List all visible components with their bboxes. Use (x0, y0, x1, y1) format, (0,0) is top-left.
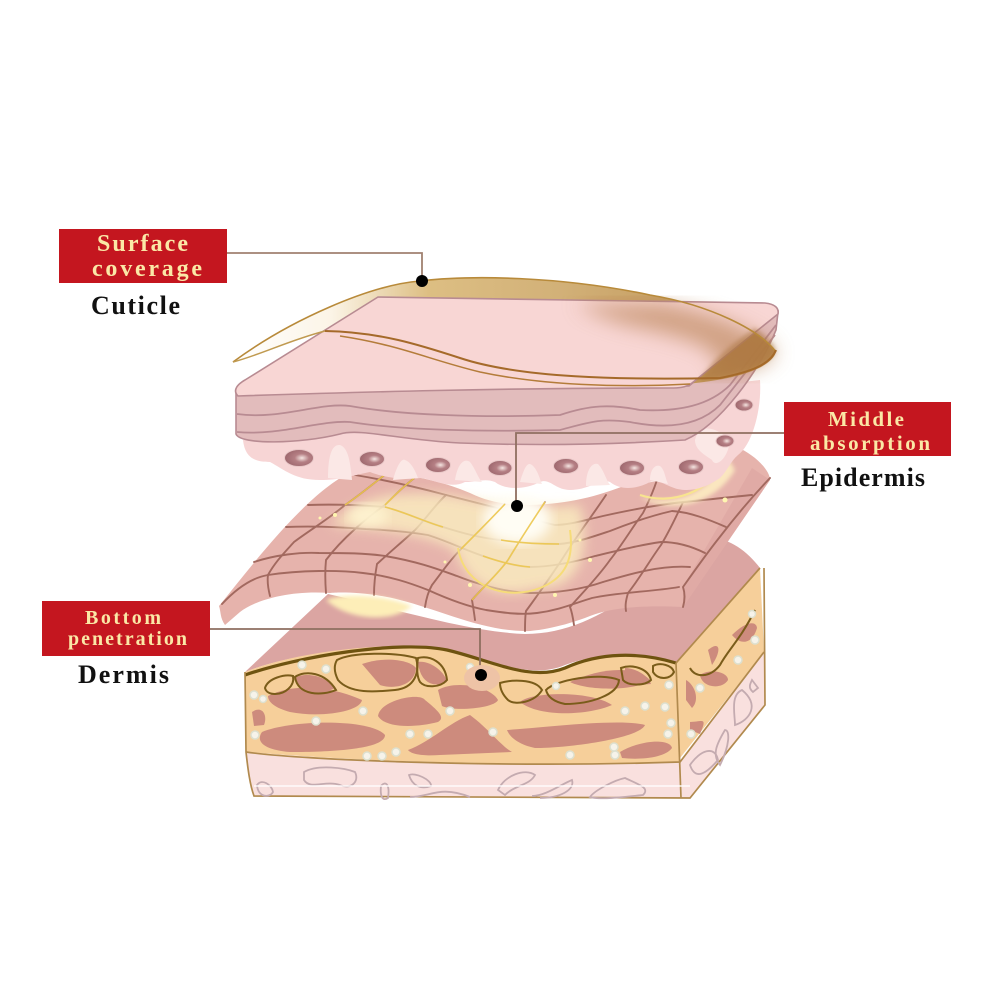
cell halo (464, 665, 500, 691)
dermis lower pink layer (246, 652, 765, 798)
gold lens back (233, 278, 776, 386)
illustration: cuticle stacked plate (233, 278, 778, 444)
layer line 2 (237, 335, 775, 433)
stacked plate sides (236, 312, 778, 444)
red label (784, 402, 951, 456)
leader line (516, 433, 785, 505)
illustration: dermis block (245, 538, 765, 799)
lower gold glow (326, 595, 412, 617)
dermis block outlines (245, 568, 765, 798)
lower layer cell outlines (257, 680, 758, 799)
pink bumpy layer (243, 380, 760, 490)
sheet surface (219, 447, 770, 631)
illustration: epidermis grid sheet (219, 447, 770, 631)
label text: Middle (828, 407, 904, 431)
gold lens shading on plate (575, 303, 776, 376)
dermis tissue blobs (252, 623, 757, 759)
layer name: Cuticle (91, 291, 180, 320)
callout: surface coverage (59, 229, 428, 320)
callout: bottom penetration: penetration (68, 628, 187, 650)
dermis top gold edge (245, 647, 676, 675)
leader line (209, 629, 480, 672)
grid lines (222, 469, 770, 631)
gold serum glow (318, 455, 735, 600)
dermis front fat layer (245, 646, 680, 764)
red label (59, 229, 227, 283)
label text: Bottom (85, 607, 161, 629)
scan line (254, 785, 690, 787)
papillae highlights (328, 428, 730, 486)
fat droplets (250, 610, 759, 760)
red label (42, 601, 210, 656)
leader line (226, 253, 422, 281)
callout: bottom penetration (42, 601, 500, 691)
marker dot (511, 500, 523, 512)
dermis side face (676, 568, 764, 758)
callout: middle absorption (511, 402, 951, 512)
dermis fibre cells (265, 610, 755, 704)
layer line 1 (237, 325, 776, 416)
marker dot (475, 669, 487, 681)
illustration: epidermis pink layer with cells (243, 380, 760, 490)
gold lens rim bottom (325, 331, 776, 379)
dermis top surface (245, 538, 760, 672)
label text: Surface (97, 231, 188, 257)
callout: surface coverage: coverage (92, 256, 202, 282)
layer name: Dermis (78, 660, 169, 689)
layer name: Epidermis (801, 463, 925, 492)
callout: middle absorption: absorption (810, 431, 930, 455)
plate top surface (236, 297, 778, 396)
cells (284, 399, 753, 476)
sheet right thickness (683, 468, 770, 607)
gold lens rim top (233, 278, 776, 362)
marker dot (416, 275, 428, 287)
